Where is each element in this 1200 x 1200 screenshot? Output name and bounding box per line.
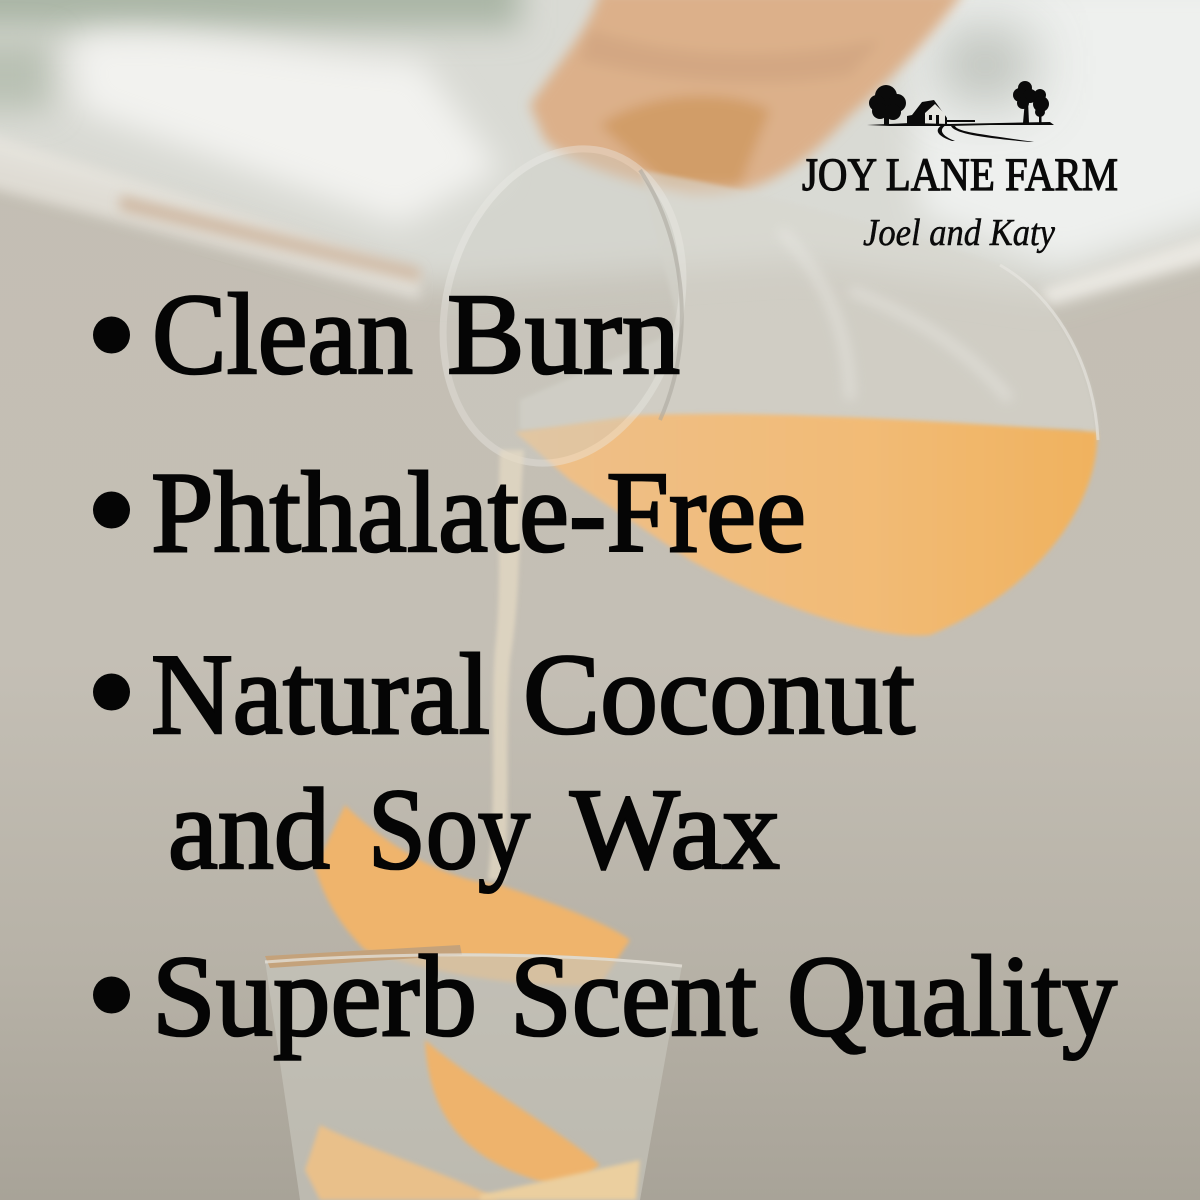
glass jug — [407, 120, 1098, 636]
logo signature: Joel and Katy — [863, 212, 1055, 254]
bullet: Natural Coconut and Soy Wax: Coconut — [523, 631, 915, 759]
bullet: Natural Coconut and Soy Wax: Wax — [570, 766, 780, 894]
drinking glass — [265, 945, 682, 1200]
poured stream — [488, 450, 524, 880]
bullet: Clean Burn: Clean — [152, 271, 413, 399]
bullet: Clean Burn: Burn — [447, 271, 680, 399]
bullet: Superb Scent Quality: Superb — [152, 933, 477, 1061]
orange pieces in glass — [425, 1040, 600, 1190]
bullet: Phthalate-Free: Phthalate-Free — [151, 449, 806, 577]
bullet: Superb Scent Quality: Scent — [510, 933, 757, 1061]
bullet: Natural Coconut and Soy Wax — [93, 631, 915, 894]
logo wordmark: JOY LANE FARM — [802, 149, 1118, 201]
bullet: Clean Burn — [93, 271, 680, 399]
orange slice — [315, 805, 630, 986]
logo: Joy Lane Farm — [802, 81, 1118, 254]
bullet: Superb Scent Quality — [93, 933, 1117, 1061]
orange liquid in jug — [515, 414, 1097, 636]
bullet: Natural Coconut and Soy Wax: Soy — [368, 766, 530, 894]
bullet list — [93, 271, 1117, 1061]
hand — [530, 0, 965, 195]
bullet: Superb Scent Quality: Quality — [787, 933, 1117, 1061]
icon: farmhouse and trees — [867, 81, 1054, 142]
bullet: Natural Coconut and Soy Wax: Natural — [151, 631, 490, 759]
bullet: Natural Coconut and Soy Wax: and — [168, 766, 330, 894]
